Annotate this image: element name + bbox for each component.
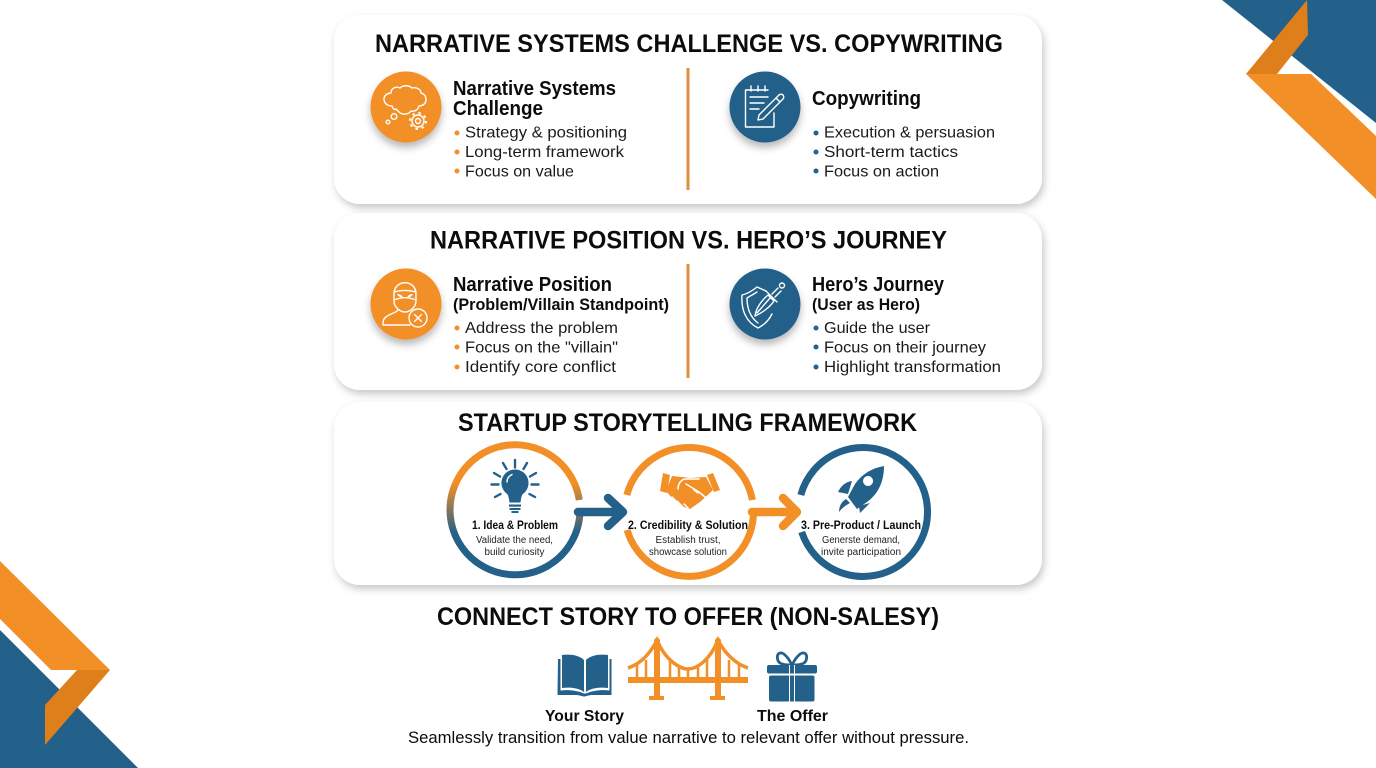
text block: copywriting (812, 88, 995, 180)
step 2: credibility and solution (627, 447, 754, 576)
text block: hero's journey: Highlight transformation (824, 359, 1001, 376)
heading: NARRATIVE SYSTEMS CHALLENGE VS. COPYWRITING (375, 30, 1003, 58)
icon: handshake (660, 473, 720, 509)
description (821, 535, 901, 558)
description (649, 535, 727, 558)
icon: light bulb (492, 460, 538, 513)
text block: narrative position: Address the problem (465, 320, 618, 337)
text block: narrative systems challenge: Narrative Systems (453, 78, 616, 100)
description: invite participation (821, 547, 901, 558)
text block: narrative position: (Problem/Villain Standpoint) (453, 295, 669, 314)
text block: narrative position: Identify core conflict (465, 359, 617, 376)
text block: narrative position: Narrative Position (453, 274, 612, 296)
description: Validate the need, (476, 535, 553, 546)
text block: narrative systems challenge: Focus on value (465, 164, 574, 180)
icon: shield and sword (730, 268, 800, 340)
text block: narrative position (453, 274, 669, 376)
text block: narrative position: Focus on the "villain" (465, 340, 618, 356)
description: showcase solution (649, 547, 727, 558)
heading: STARTUP STORYTELLING FRAMEWORK (458, 409, 917, 437)
panel: narrative systems challenge vs copywriting (334, 15, 1042, 204)
text block: hero's journey: Guide the user (824, 320, 931, 337)
label: the offer: The Offer (757, 708, 828, 725)
description: build curiosity (484, 547, 544, 558)
step 1: idea and problem (450, 445, 580, 575)
text block: narrative systems challenge: Challenge (453, 98, 543, 120)
text block: copywriting: Execution & persuasion (824, 124, 995, 142)
label: 2. Credibility & Solution (628, 518, 748, 532)
text block: narrative systems challenge: Strategy & positioning (465, 124, 627, 142)
icon: notepad and pencil (730, 72, 800, 142)
label: your story: Your Story (545, 708, 624, 725)
panel: narrative position vs hero's journey (334, 213, 1042, 390)
icon: open book (558, 655, 612, 696)
text block: narrative systems challenge: Long-term framework (465, 144, 625, 161)
corner decoration: top right (1222, 0, 1376, 199)
icon: gift box (767, 653, 817, 702)
heading: CONNECT STORY TO OFFER (NON-SALESY) (437, 603, 939, 631)
description: Establish trust, (656, 535, 720, 546)
panel: startup storytelling framework (334, 402, 1042, 585)
icon: thought cloud with gear (370, 72, 442, 142)
text block: copywriting: Short-term tactics (824, 144, 958, 161)
heading: NARRATIVE POSITION VS. HERO’S JOURNEY (430, 226, 947, 254)
description (476, 535, 553, 558)
arrow: step 2 to 3 (752, 498, 797, 526)
text block: hero's journey: (User as Hero) (812, 295, 920, 314)
text block: hero's journey: Focus on their journey (824, 340, 986, 356)
icon: bridge (628, 638, 748, 700)
arrow: step 1 to 2 (578, 498, 623, 526)
icon: masked villain (370, 268, 442, 340)
corner decoration: bottom left (0, 561, 138, 768)
text block: narrative systems challenge (453, 78, 627, 180)
icon: rocket (838, 466, 884, 513)
text block: hero's journey (812, 274, 1001, 376)
section: connect story to offer (408, 603, 969, 747)
caption: Seamlessly transition from value narrative to relevant offer without pressure. (408, 729, 969, 747)
step 3: pre-product launch (801, 447, 928, 576)
divider (686, 264, 690, 378)
description: Generste demand, (822, 535, 900, 546)
label: 1. Idea & Problem (472, 518, 558, 532)
divider (686, 68, 690, 190)
text block: hero's journey: Hero’s Journey (812, 274, 945, 296)
text block: copywriting: Copywriting (812, 88, 921, 110)
text block: copywriting: Focus on action (824, 164, 939, 180)
label: 3. Pre-Product / Launch (801, 518, 921, 532)
